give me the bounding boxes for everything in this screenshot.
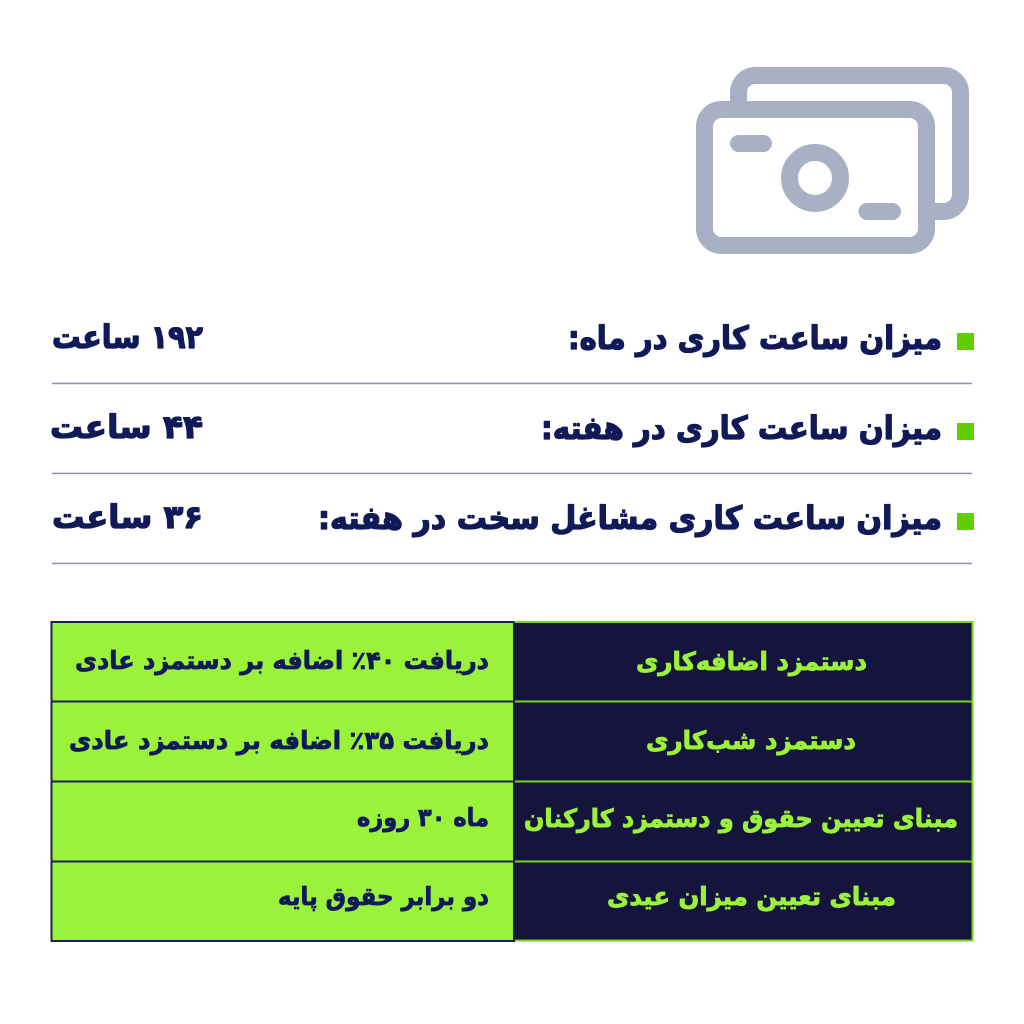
icon: banknotes (704, 76, 960, 246)
row 4: bonus basis: دو برابر حقوق پایه (278, 882, 489, 912)
row: hard jobs weekly hours: ۳۶ ساعت (52, 498, 203, 536)
panel: working hours list (50, 318, 974, 564)
row: weekly hours: میزان ساعت کاری در هفته: (541, 409, 942, 447)
row 1: overtime wage: دریافت ۴۰٪ اضافه بر دستمزد عادی (75, 646, 489, 676)
row 2: night shift wage: دستمزد شب‌کاری (646, 726, 856, 756)
row 2: night shift wage: دریافت ۳۵٪ اضافه بر دستمزد عادی (69, 726, 489, 756)
row: weekly hours: ۴۴ ساعت (50, 408, 203, 446)
row: hard jobs weekly hours: میزان ساعت کاری مشاغل سخت در هفته: (318, 499, 942, 537)
row 3: salary basis: مبنای تعیین حقوق و دستمزد کارکنان (524, 804, 958, 834)
table: wage rules (52, 622, 972, 941)
row 3: salary basis (357, 803, 958, 834)
row: monthly hours: ۱۹۲ ساعت (52, 318, 203, 356)
row 1: overtime wage (75, 646, 867, 677)
row 4: bonus basis (278, 882, 896, 912)
row 2: night shift wage (69, 726, 856, 756)
row 4: bonus basis: مبنای تعیین میزان عیدی (607, 882, 896, 912)
row 1: overtime wage: دستمزد اضافه‌کاری (636, 647, 867, 677)
row: monthly hours: میزان ساعت کاری در ماه: (568, 319, 942, 357)
row 3: salary basis: ماه ۳۰ روزه (357, 803, 489, 833)
row: hard jobs weekly hours (52, 498, 974, 537)
row: monthly hours (52, 318, 974, 357)
row: weekly hours (50, 408, 974, 447)
